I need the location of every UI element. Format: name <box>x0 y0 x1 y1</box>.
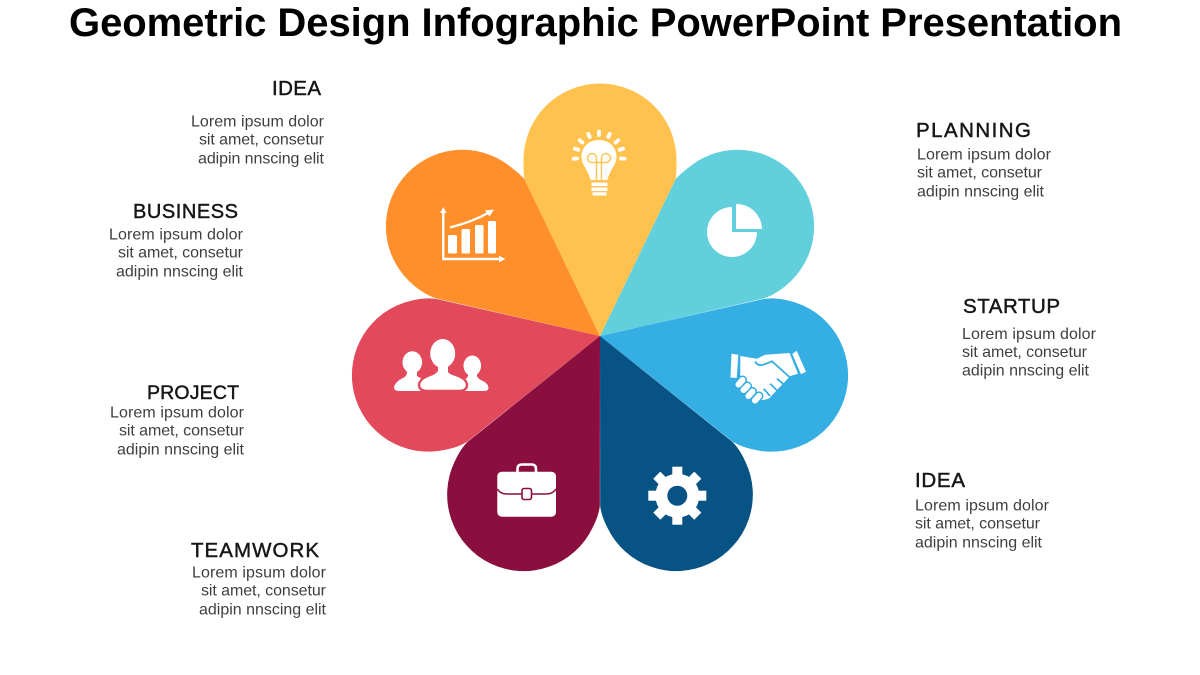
panel: maroon petal with briefcase <box>422 303 669 597</box>
text block: STARTUP <box>962 295 1097 380</box>
icon: gear <box>648 467 706 525</box>
text block: IDEA (bottom right): sit amet, consetur <box>915 516 1041 532</box>
text block: PROJECT <box>110 382 245 458</box>
text block: IDEA (top left) <box>191 77 325 168</box>
text block: PROJECT: PROJECT <box>147 382 239 404</box>
icon: pie chart <box>707 204 762 257</box>
icon: growth chart <box>440 207 506 262</box>
icon: handshake <box>730 351 806 400</box>
panel: navy petal with gear <box>531 303 778 597</box>
text block: BUSINESS: adipin nnscing elit <box>116 264 244 280</box>
text block: IDEA (bottom right): adipin nnscing elit <box>915 534 1043 552</box>
text block: PROJECT: sit amet, consetur <box>119 422 245 440</box>
panel: blue petal with handshake <box>583 261 863 467</box>
text block: PLANNING <box>916 119 1052 200</box>
text block: TEAMWORK <box>191 539 327 618</box>
text block: IDEA (bottom right) <box>915 469 1050 552</box>
icon: briefcase <box>497 464 556 517</box>
text block: STARTUP: sit amet, consetur <box>962 344 1088 361</box>
text block: PLANNING: Lorem ipsum dolor <box>917 146 1052 164</box>
text block: PLANNING: sit amet, consetur <box>917 164 1043 182</box>
petal: yellow <box>523 83 677 336</box>
petal: red <box>337 261 617 467</box>
text block: PROJECT: adipin nnscing elit <box>117 442 245 458</box>
panel: orange petal with growth chart <box>355 119 648 396</box>
panel: red petal with people <box>337 261 617 467</box>
petal: orange <box>355 119 648 396</box>
text block: IDEA (top left): sit amet, consetur <box>199 132 325 148</box>
text block: PROJECT: Lorem ipsum dolor <box>110 404 245 422</box>
text block: IDEA (top left): Lorem ipsum dolor <box>191 114 325 130</box>
text block: IDEA (top left): IDEA <box>272 77 321 100</box>
petal: teal <box>552 119 845 396</box>
icon: light bulb <box>574 132 624 196</box>
petal: navy <box>531 303 778 597</box>
text block: BUSINESS: BUSINESS <box>133 201 238 223</box>
text block: BUSINESS <box>109 201 244 280</box>
title: Geometric Design Infographic PowerPoint Presentation <box>69 1 1122 45</box>
panel: teal petal with pie chart <box>552 119 845 396</box>
text block: STARTUP: adipin nnscing elit <box>962 362 1090 380</box>
text block: BUSINESS: sit amet, consetur <box>118 244 244 262</box>
text block: TEAMWORK: adipin nnscing elit <box>199 602 327 618</box>
text block: IDEA (bottom right): IDEA <box>915 469 965 492</box>
icon: three people <box>394 339 488 391</box>
text block: STARTUP: Lorem ipsum dolor <box>962 326 1097 343</box>
petal: blue <box>583 261 863 467</box>
text block: TEAMWORK: sit amet, consetur <box>201 582 327 600</box>
panel: yellow petal with light bulb <box>523 83 677 336</box>
text block: STARTUP: STARTUP <box>963 295 1060 318</box>
text block: TEAMWORK: Lorem ipsum dolor <box>192 564 327 582</box>
text block: IDEA (bottom right): Lorem ipsum dolor <box>915 498 1050 514</box>
text block: IDEA (top left): adipin nnscing elit <box>198 150 325 168</box>
text block: BUSINESS: Lorem ipsum dolor <box>109 226 244 244</box>
petal: maroon <box>422 303 669 597</box>
text block: TEAMWORK: TEAMWORK <box>191 539 319 562</box>
text block: PLANNING: adipin nnscing elit <box>917 184 1045 200</box>
text block: PLANNING: PLANNING <box>916 119 1031 142</box>
